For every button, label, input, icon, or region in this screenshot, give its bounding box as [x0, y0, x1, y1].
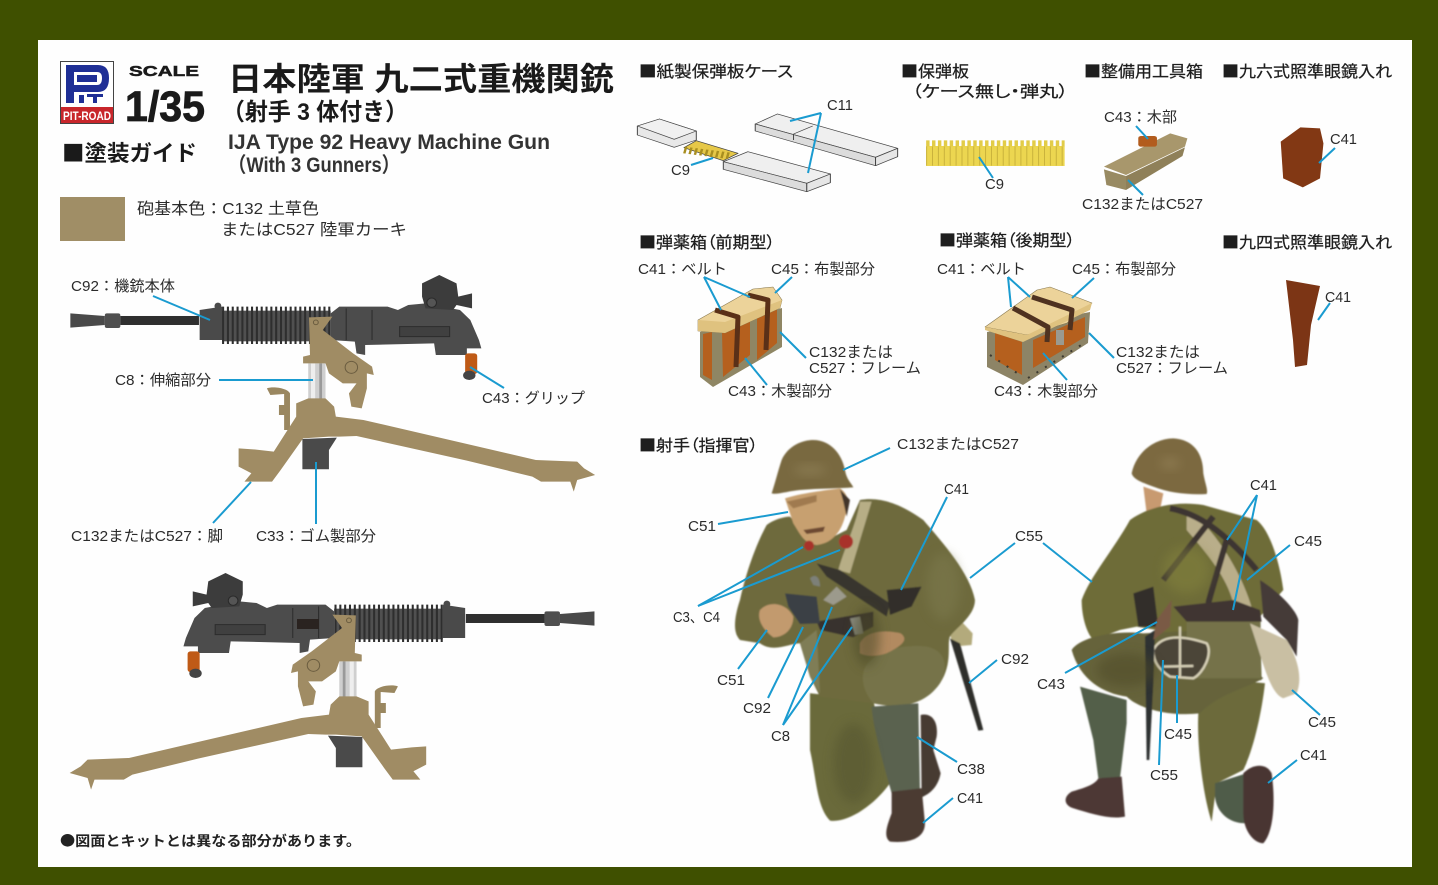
machine gun callouts	[71, 278, 585, 545]
parts callouts: C43：木製部分	[728, 383, 832, 400]
figure callouts	[673, 436, 1336, 823]
parts row 1: cases, strip, tool box, sight case	[637, 114, 1323, 192]
machine gun callouts: C43：グリップ	[482, 390, 585, 407]
machine gun callouts: C33：ゴム製部分	[256, 527, 376, 545]
parts callouts: C43：木製部分	[994, 383, 1098, 400]
figure callouts: C3、C4	[673, 609, 720, 626]
figure callouts: C51	[688, 518, 716, 535]
parts callouts: C11	[827, 97, 853, 114]
title: 日本陸軍 九二式重機関銃	[228, 61, 614, 97]
logo: PIT-ROAD: PIT-ROAD	[63, 111, 111, 123]
logo: PIT-ROAD	[60, 62, 114, 124]
scale badge: SCALE	[129, 63, 199, 80]
parts callouts: C41	[1325, 289, 1351, 306]
section headings: ■九六式照準眼鏡入れ	[1222, 58, 1392, 82]
section headings: ■九四式照準眼鏡入れ	[1222, 229, 1392, 253]
figure callouts: C45	[1164, 726, 1192, 743]
cartridge strip	[926, 143, 1065, 166]
parts callouts: C132または	[809, 344, 893, 361]
footnote: ●図面とキットとは異なる部分があります。	[60, 831, 361, 851]
figure callouts: C38	[957, 761, 985, 778]
figure callouts: C41	[1250, 477, 1277, 494]
scale badge: 1/35	[125, 83, 205, 131]
figure callouts: C92	[743, 700, 771, 717]
parts callouts: C527：フレーム	[1116, 360, 1228, 377]
colour swatch and legend	[60, 197, 407, 241]
ammo box, early type	[698, 287, 782, 387]
sight case type 94	[1286, 280, 1320, 367]
parts callouts: C9	[985, 176, 1004, 193]
figure callouts: C132またはC527	[897, 436, 1019, 453]
machine gun diagram, right view	[70, 573, 594, 790]
sight case type 96	[1281, 127, 1323, 187]
parts callouts: C41：ベルト	[638, 261, 727, 278]
parts callouts: C132または	[1116, 344, 1200, 361]
parts callouts: C43：木部	[1104, 109, 1177, 126]
figure callouts: C41	[957, 790, 983, 807]
title: （With 3 Gunners）	[228, 154, 400, 177]
figure: commander, rear view	[1066, 438, 1299, 843]
scale badge	[125, 63, 205, 131]
machine gun diagram, left view	[70, 275, 595, 492]
figure: commander, front view	[735, 440, 983, 842]
figure callouts: C43	[1037, 676, 1065, 693]
figure callouts: C51	[717, 672, 745, 689]
section headings	[639, 58, 1392, 456]
tool box	[1104, 133, 1187, 190]
machine gun callouts: C8：伸縮部分	[115, 372, 211, 389]
figure callouts: C41	[1300, 747, 1327, 764]
section headings: （ケース無し・弾丸）	[912, 78, 1068, 102]
machine gun callouts: C92：機銃本体	[71, 278, 175, 295]
section headings: ■弾薬箱（前期型）	[639, 229, 775, 253]
heading: painting guide: ■塗装ガイド	[62, 136, 197, 168]
figure callouts: C45	[1294, 533, 1322, 550]
figure callouts: C55	[1015, 528, 1043, 545]
paper case, open	[637, 114, 898, 192]
machine gun callouts: C132またはC527：脚	[71, 528, 223, 545]
parts callouts: C527：フレーム	[809, 360, 921, 377]
section headings: ■紙製保弾板ケース	[639, 58, 793, 82]
parts callouts: C9	[671, 162, 690, 179]
parts callouts: C45：布製部分	[1072, 261, 1176, 278]
colour swatch and legend: またはC527 陸軍カーキ	[221, 221, 407, 239]
figure callouts: C45	[1308, 714, 1336, 731]
section headings: ■整備用工具箱	[1084, 58, 1203, 82]
section headings: ■保弾板	[901, 58, 969, 82]
title: （射手 3 体付き）	[222, 99, 408, 126]
title	[222, 61, 614, 177]
parts callouts: C41：ベルト	[937, 261, 1026, 278]
colour swatch and legend: 砲基本色：C132 土草色	[137, 200, 319, 218]
figure callouts: C8	[771, 728, 790, 745]
figure callouts: C41	[944, 481, 969, 498]
title: IJA Type 92 Heavy Machine Gun	[228, 131, 550, 154]
figure callouts: C55	[1150, 767, 1178, 784]
section headings: ■射手（指揮官）	[639, 432, 758, 456]
parts callouts: C41	[1330, 131, 1357, 148]
parts callouts: C45：布製部分	[771, 261, 875, 278]
figure callouts: C92	[1001, 651, 1029, 668]
ammo box, late type	[985, 287, 1092, 385]
parts callouts: C132またはC527	[1082, 196, 1203, 213]
section headings: ■弾薬箱（後期型）	[939, 227, 1075, 251]
parts callouts	[638, 97, 1357, 400]
